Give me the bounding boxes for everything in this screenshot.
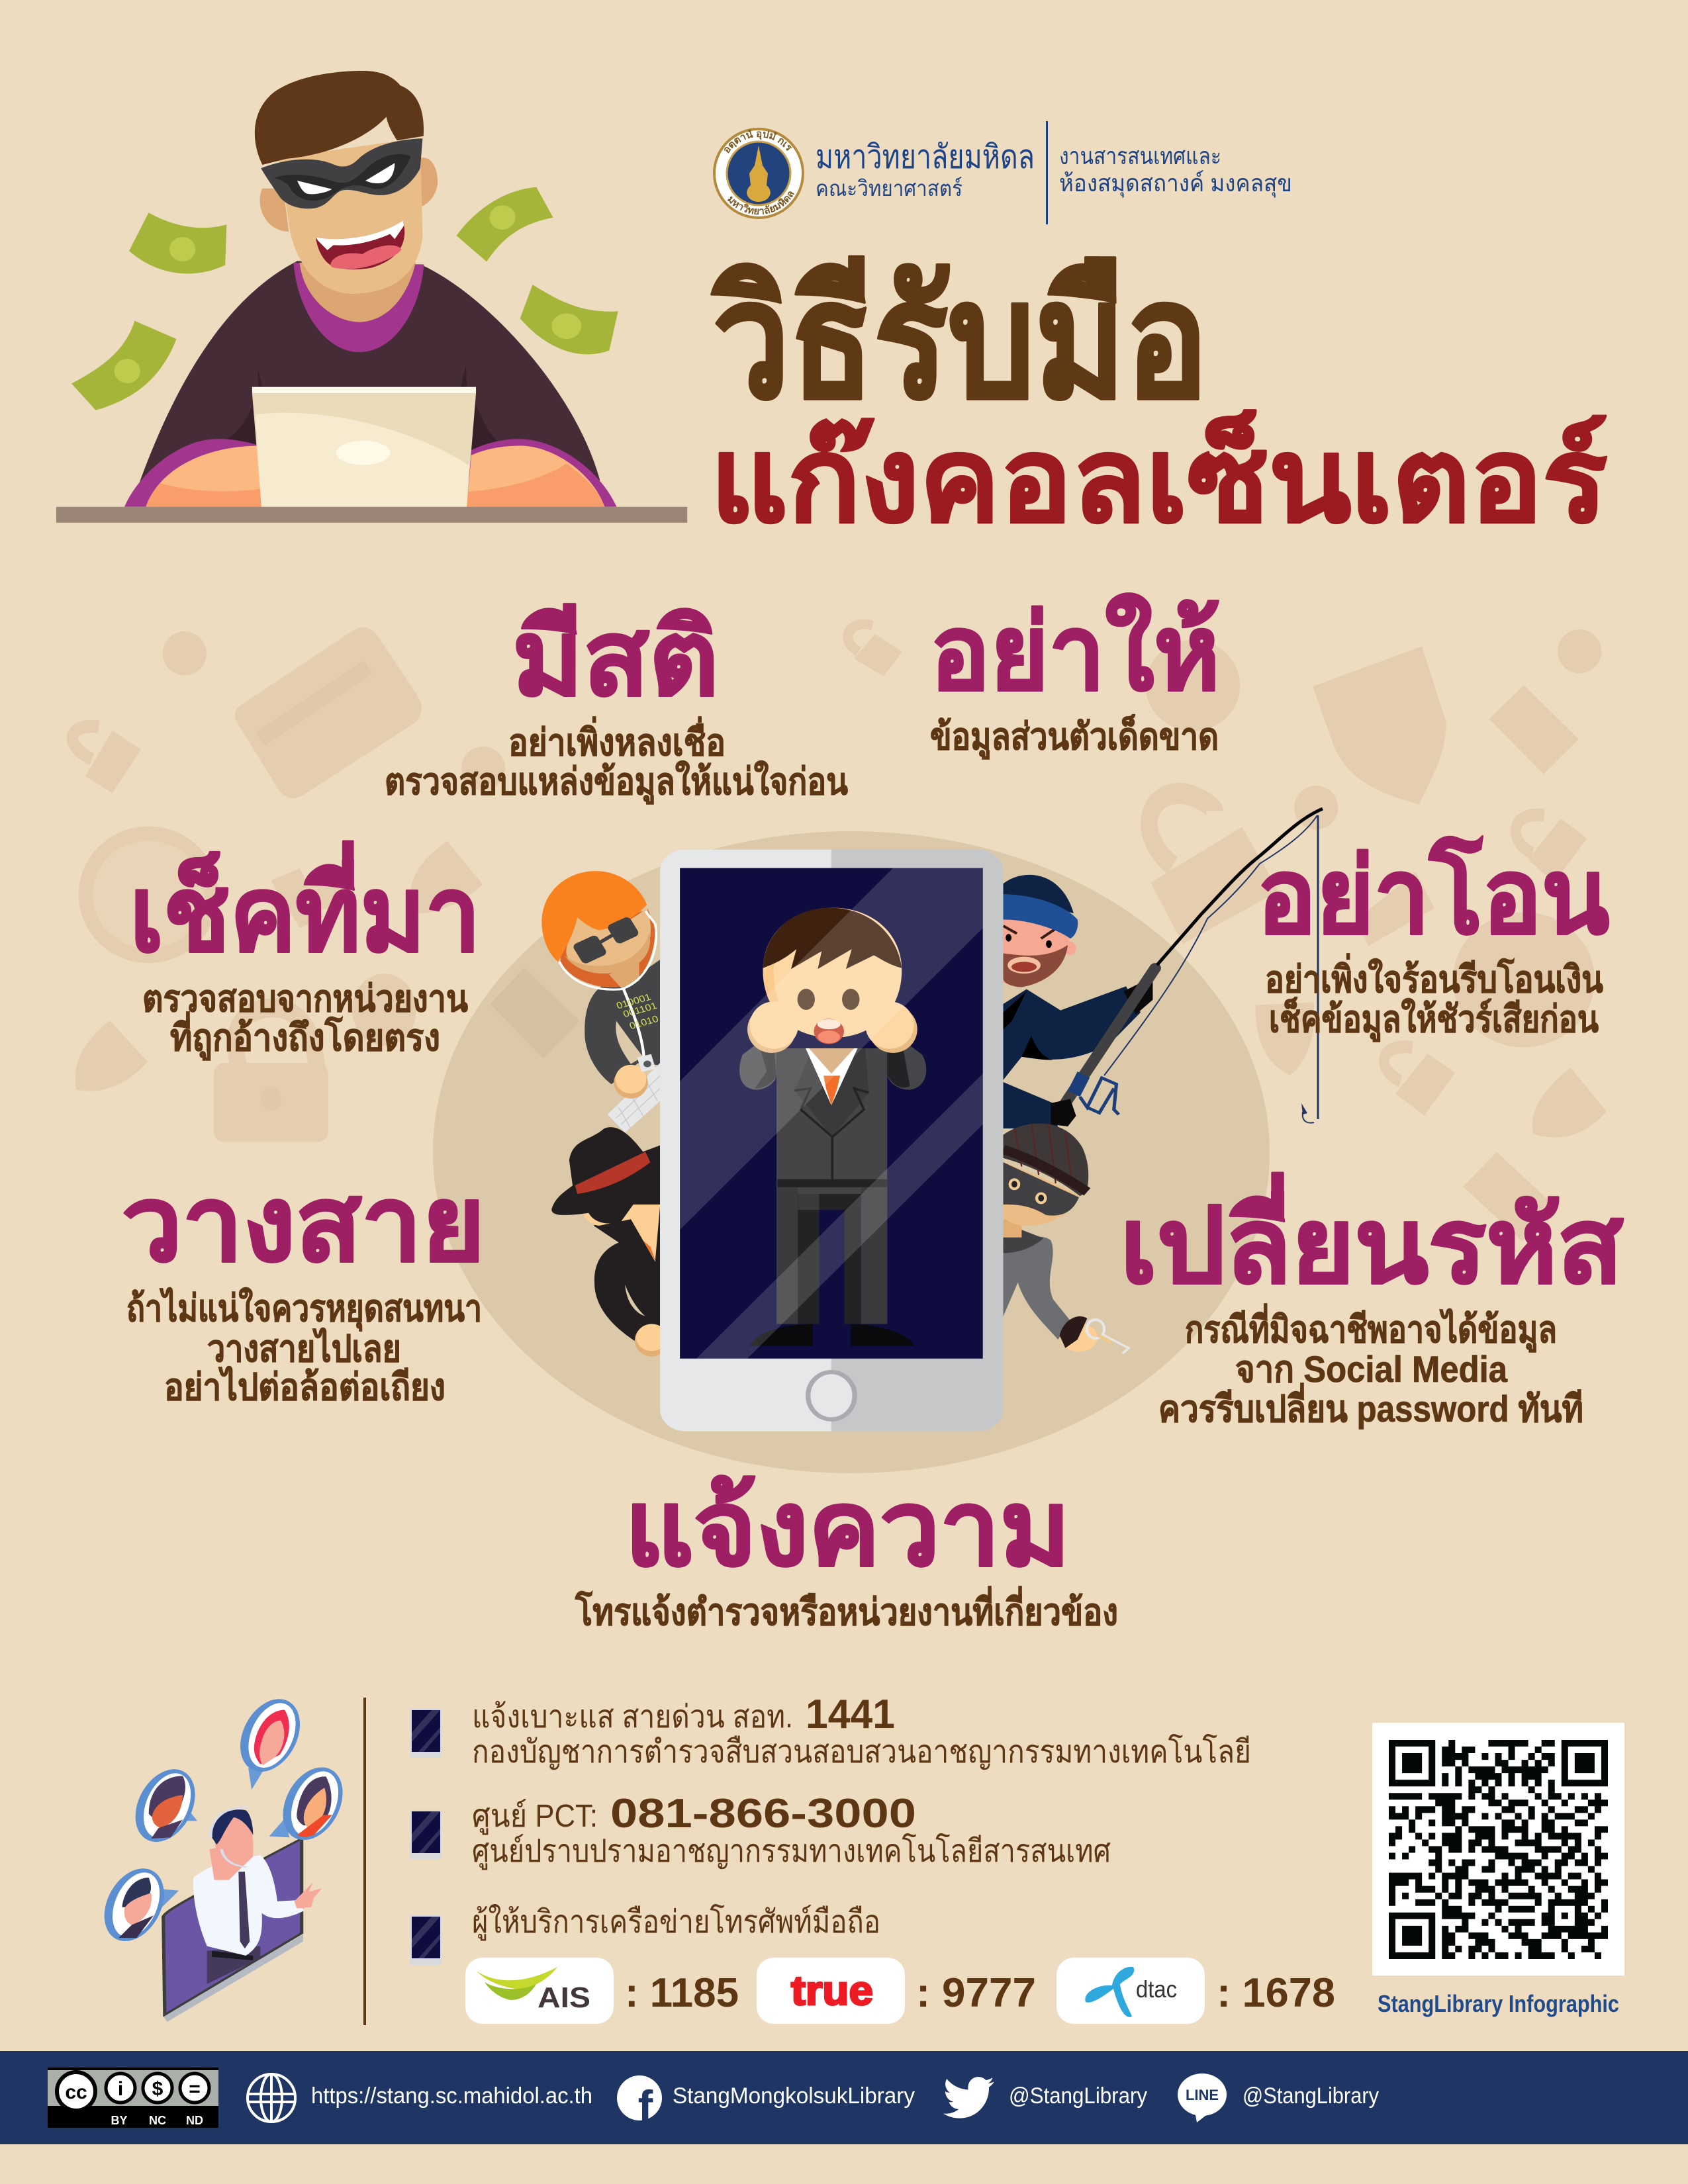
title: วิธีรับมือ xyxy=(711,250,1208,431)
background pattern: left watermark icons xyxy=(73,627,569,1142)
title xyxy=(710,250,1607,546)
laptop xyxy=(252,387,476,507)
background pattern: small lock xyxy=(848,624,902,676)
facebook name: StangMongkolsukLibrary xyxy=(673,2083,915,2109)
icon: banknote xyxy=(457,187,553,261)
number: 1678: : 1678 xyxy=(1217,1970,1335,2016)
line handle: @StangLibrary xyxy=(1243,2083,1379,2109)
logo text: university name xyxy=(816,138,1035,201)
heading: อย่าให้ xyxy=(930,593,1220,711)
description xyxy=(142,978,468,1061)
logo: Mahidol University seal: อตฺตานํ อุปมํ กเร xyxy=(724,130,792,154)
description: ตรวจสอบแหล่งข้อมูลให้แน่ใจก่อน xyxy=(385,760,848,805)
footer band xyxy=(0,2051,1688,2144)
speech bubble: woman xyxy=(232,1697,308,1790)
icon: mini phone xyxy=(410,1810,442,1859)
tip: have awareness xyxy=(385,600,848,805)
hotline: 1441 xyxy=(472,1692,1251,1770)
description: จาก Social Media xyxy=(1235,1348,1508,1390)
binary code on hacker shirt xyxy=(615,992,660,1032)
hair xyxy=(255,71,424,165)
icon: banknote xyxy=(520,285,618,354)
operator: AIS xyxy=(465,1958,614,2024)
background pattern: right watermark icons xyxy=(1146,629,1607,1242)
large beige ellipse backdrop xyxy=(433,831,1270,1473)
title: แก๊งคอลเซ็นเตอร์ xyxy=(710,410,1607,546)
operator: true xyxy=(757,1958,905,2024)
description: โทรแจ้งตำรวจหรือหน่วยงานที่เกี่ยวข้อง xyxy=(575,1586,1118,1633)
description xyxy=(1265,953,1603,1042)
logo text: library name: ห้องสมุดสถางค์ มงคลสุข xyxy=(1059,169,1292,198)
illustration: masked hacker with laptop and money xyxy=(56,71,687,523)
hands and sleeves xyxy=(124,439,617,507)
description: อย่าเพิ่งใจร้อนรีบโอนเงิน xyxy=(1265,953,1603,1000)
operator: AIS: AIS xyxy=(538,1981,590,2014)
binary code on hacker shirt: 001101 xyxy=(622,1001,659,1020)
description: ตรวจสอบจากหน่วยงาน xyxy=(142,978,468,1019)
licence badge: i xyxy=(118,2078,123,2100)
logo text: library name xyxy=(1059,142,1292,198)
description: เช็คข้อมูลให้ชัวร์เสียก่อน xyxy=(1269,996,1599,1042)
logo text: library name: งานสารสนเทศและ xyxy=(1059,142,1221,169)
mobile operators heading: ผู้ให้บริการเครือข่ายโทรศัพท์มือถือ xyxy=(472,1903,880,1941)
tip: check the source xyxy=(130,841,481,1061)
binary code on hacker shirt: 010001 xyxy=(615,992,653,1011)
icon: banknote xyxy=(71,321,177,410)
QR code xyxy=(1372,1723,1624,1976)
description: กรณีที่มิจฉาชีพอาจได้ข้อมูล xyxy=(1185,1303,1557,1353)
licence badge: $ xyxy=(152,2078,164,2100)
speech bubble: man in tie xyxy=(96,1866,179,1943)
description: วางสายไปเลย xyxy=(207,1327,401,1369)
monitor xyxy=(162,1839,303,2022)
QR caption: StangLibrary Infographic xyxy=(1378,1990,1619,2017)
tip: do not give xyxy=(930,593,1220,760)
home button xyxy=(808,1372,855,1420)
hotline: PCT xyxy=(472,1791,1111,1870)
icon: banknote xyxy=(129,212,226,273)
hotline: 1441: แจ้งเบาะแส สายด่วน สอท. xyxy=(472,1700,793,1735)
scammer: man in black hat xyxy=(551,1127,669,1357)
agent xyxy=(193,1807,322,1984)
number: 9777: : 9777 xyxy=(916,1970,1036,2016)
website: https://stang.sc.mahidol.ac.th xyxy=(311,2083,592,2109)
logo: Mahidol University seal: มหาวิทยาลัยมหิดล xyxy=(727,191,794,214)
scammer: bearded fisherman xyxy=(1004,875,1155,1128)
screen reflection xyxy=(680,868,983,1359)
mask xyxy=(261,138,422,208)
binary code on hacker shirt: 01010 xyxy=(628,1014,660,1032)
icon: mini phone xyxy=(410,1709,442,1758)
heading: มีสติ xyxy=(512,600,719,717)
number: 1185: : 1185 xyxy=(625,1970,739,2016)
operator: true: true xyxy=(791,1968,873,2014)
description: อย่าไปต่อล้อต่อเถียง xyxy=(164,1365,445,1408)
description: ถ้าไม่แน่ใจควรหยุดสนทนา xyxy=(126,1287,482,1332)
heading: เปลี่ยนรหัส xyxy=(1120,1172,1624,1304)
hotline: PCT: ศูนย์ปราบปรามอาชญากรรมทางเทคโนโลยีสารสนเทศ xyxy=(472,1833,1111,1870)
logo: Mahidol University seal xyxy=(713,128,804,219)
licence badge xyxy=(48,2068,218,2128)
heading: แจ้งความ xyxy=(625,1471,1070,1587)
licence badge: BY xyxy=(111,2114,128,2127)
operator: dtac xyxy=(1056,1958,1205,2024)
tip: report xyxy=(575,1471,1118,1633)
description: ควรรีบเปลี่ยน password ทันที xyxy=(1158,1383,1583,1430)
scammer: burglar with key xyxy=(1004,1123,1129,1353)
icon: LINE xyxy=(1178,2073,1227,2122)
description xyxy=(1158,1303,1583,1430)
phone xyxy=(660,850,1004,1431)
fishing rod and hook xyxy=(1104,809,1323,1123)
description xyxy=(126,1287,482,1408)
icon: mini phone xyxy=(410,1915,442,1965)
icon: facebook xyxy=(617,2075,662,2132)
icon: LINE: LINE xyxy=(1186,2087,1219,2103)
heading: วางสาย xyxy=(122,1166,485,1283)
illustration: phone with scammers xyxy=(490,850,1155,1431)
scammer: orange hair hacker xyxy=(541,871,660,1133)
icon: globe xyxy=(248,2074,295,2122)
logo text: university name: มหาวิทยาลัยมหิดล xyxy=(816,138,1035,175)
hotline: PCT: ศูนย์ PCT: xyxy=(472,1799,598,1835)
tip: change password xyxy=(1120,1172,1624,1430)
illustration: call centre agent with speech bubbles xyxy=(96,1697,352,2022)
twitter handle: @StangLibrary xyxy=(1009,2083,1147,2109)
operator: dtac: dtac xyxy=(1136,1976,1177,2003)
desk xyxy=(56,507,687,523)
licence badge: NC xyxy=(149,2114,166,2127)
hotline: 1441: 1441 xyxy=(806,1692,895,1737)
tip: hang up xyxy=(122,1166,485,1408)
description: ข้อมูลส่วนตัวเด็ดขาด xyxy=(930,713,1219,760)
hotline: 1441: กองบัญชาการตำรวจสืบสวนสอบสวนอาชญากรรมทางเทคโนโลยี xyxy=(472,1733,1251,1770)
licence badge: ND xyxy=(186,2114,203,2127)
body: hacker torso xyxy=(138,261,600,486)
mouth xyxy=(316,220,404,269)
description: อย่าเพิ่งหลงเชื่อ xyxy=(508,716,726,763)
heading: เช็คที่มา xyxy=(130,841,481,973)
licence badge: cc xyxy=(65,2081,87,2103)
speech bubble: dark-haired man xyxy=(127,1767,204,1844)
character: shocked man in suit xyxy=(739,908,926,1346)
licence badge: = xyxy=(189,2078,201,2100)
logo text: university name: คณะวิทยาศาสตร์ xyxy=(816,176,962,201)
heading: อย่าโอน xyxy=(1257,836,1609,955)
icon: twitter bird xyxy=(943,2077,994,2118)
description xyxy=(385,716,848,805)
icon: facebook: f xyxy=(638,2081,653,2132)
hotline: PCT: 081-866-3000 xyxy=(610,1791,916,1837)
description: ที่ถูกอ้างถึงโดยตรง xyxy=(170,1011,440,1061)
speech bubble: woman with orange shirt xyxy=(269,1766,352,1842)
tip: do not transfer xyxy=(1257,836,1609,1042)
